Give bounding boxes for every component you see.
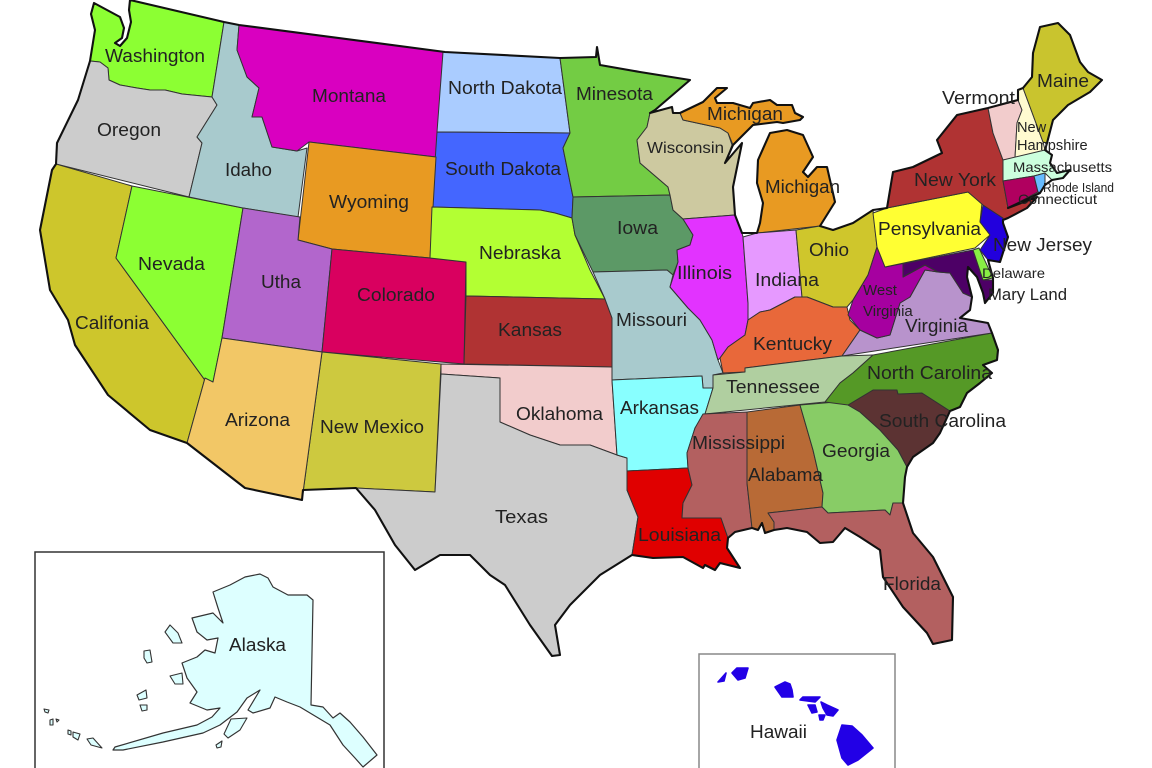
label: Florida: Florida (883, 574, 942, 594)
label: Mississippi: Mississippi (692, 433, 785, 453)
label: Nevada: Nevada (138, 254, 206, 274)
state: Kentucky (720, 297, 860, 373)
label: Maine: Maine (1037, 71, 1089, 91)
state: Missouri (593, 270, 723, 388)
label: Alaska: Alaska (229, 635, 287, 655)
label: Iowa: Iowa (617, 218, 659, 238)
label: Tennessee: Tennessee (726, 377, 820, 397)
label: Massachusetts: Massachusetts (1013, 159, 1112, 175)
state: Michigan lower peninsula (757, 130, 835, 233)
state: Nebraska (430, 207, 605, 299)
state: Tennessee (705, 355, 873, 414)
state: Ohio (796, 210, 877, 307)
state: Minnesota (560, 47, 690, 197)
state: Oregon (56, 61, 217, 197)
label: Ohio: Ohio (809, 240, 849, 260)
state: Arizona (187, 338, 322, 500)
label: Washington: Washington (105, 46, 205, 66)
label: Califonia: Califonia (75, 313, 150, 333)
Hawaii inset (699, 654, 895, 768)
label: Illinois: Illinois (677, 263, 732, 283)
state: Utah (222, 208, 332, 352)
label: North Dakota: North Dakota (448, 78, 563, 98)
label: Montana: Montana (312, 86, 387, 106)
state: New Hampshire (1015, 88, 1045, 158)
label: Missouri: Missouri (616, 310, 687, 330)
label: Pensylvania: Pensylvania (878, 219, 982, 239)
state: Delaware (973, 248, 993, 280)
label: New Hampshire: New (1017, 120, 1047, 136)
Alaska inset frame (35, 552, 384, 768)
state: South Carolina (848, 390, 950, 467)
state shapes (40, 0, 1102, 656)
label: Virginia: Virginia (905, 316, 969, 336)
state: Florida (768, 503, 953, 644)
label: Nebraska: Nebraska (479, 243, 562, 263)
label: North Carolina: North Carolina (867, 363, 993, 383)
coastline and national border outline (40, 0, 1102, 656)
state: West Virginia (848, 247, 938, 338)
state: New York (887, 108, 1037, 220)
label: Minesota: Minesota (576, 84, 654, 104)
state: Indiana (743, 230, 802, 320)
label: Arkansas: Arkansas (620, 398, 699, 418)
state: Oklahoma (441, 364, 617, 455)
state: Georgia (800, 401, 907, 515)
state: Alabama (747, 405, 823, 533)
label: Michigan upper: Michigan (707, 104, 783, 124)
state: Wyoming (298, 142, 436, 258)
label: Texas: Texas (495, 507, 548, 527)
label: West Virginia: Virginia (863, 303, 913, 320)
label: Wisconsin: Wisconsin (647, 140, 724, 157)
label: Georgia: Georgia (822, 441, 891, 461)
state: Iowa (572, 195, 693, 275)
label: Oklahoma: Oklahoma (516, 404, 604, 424)
state: Maryland (885, 250, 993, 303)
label: Michigan lower: Michigan (765, 177, 840, 197)
state: Texas (356, 374, 638, 656)
label: Idaho: Idaho (225, 160, 272, 180)
label: New York: New York (914, 170, 997, 190)
state: Nevada (116, 186, 243, 383)
state: Virginia (842, 270, 992, 356)
label: Kentucky: Kentucky (753, 334, 832, 354)
label: Indiana: Indiana (755, 270, 820, 290)
label: Louisiana: Louisiana (638, 525, 722, 545)
label: New Hampshire: Hampshire (1017, 138, 1088, 154)
Hawaiian islands (718, 668, 873, 765)
Alaska mainland (113, 574, 377, 767)
label: New Mexico: New Mexico (320, 417, 424, 437)
label: Delaware: Delaware (982, 265, 1045, 281)
label: South Carolina: South Carolina (879, 411, 1007, 431)
state: Rhode Island (1034, 173, 1045, 193)
state: Montana (237, 25, 445, 157)
state: Maine (1023, 23, 1102, 143)
state: Illinois (670, 215, 748, 360)
Hawaii inset frame (699, 654, 895, 768)
state: New Mexico (302, 352, 441, 500)
Alaska inset (35, 552, 384, 768)
label: New Jersey: New Jersey (993, 235, 1092, 255)
state: Idaho (189, 22, 307, 217)
state: South Dakota (432, 132, 573, 218)
label: Colorado: Colorado (357, 285, 435, 305)
state: North Dakota (437, 52, 570, 133)
state: North Carolina (825, 333, 998, 411)
label: Mary Land: Mary Land (988, 285, 1067, 304)
label: South Dakota: South Dakota (445, 159, 562, 179)
label: West Virginia: West (863, 282, 898, 299)
label: Arizona: Arizona (225, 410, 291, 430)
label: Oregon: Oregon (97, 120, 161, 140)
state: Kansas (464, 296, 612, 367)
state: Louisiana (627, 468, 740, 570)
state: Pennsylvania (873, 192, 990, 267)
Alaska islands (44, 625, 247, 748)
state: Washington (90, 0, 224, 97)
label: Wyoming: Wyoming (329, 192, 409, 212)
label: Hawaii: Hawaii (750, 722, 807, 742)
state: Michigan upper peninsula (680, 88, 803, 145)
label: Utha: Utha (261, 272, 302, 292)
label: Alabama: Alabama (748, 465, 824, 485)
label: Connecticut: Connecticut (1018, 191, 1097, 207)
state: Mississippi (682, 412, 752, 538)
label: Kansas: Kansas (498, 320, 562, 340)
label: Vermont: Vermont (942, 88, 1015, 108)
state: New Jersey (980, 205, 1008, 262)
state: Vermont (988, 100, 1022, 160)
state: California (40, 164, 207, 443)
state: Arkansas (612, 376, 713, 471)
state: Massachusetts (1003, 150, 1070, 181)
state: Connecticut (1003, 176, 1038, 208)
state: Wisconsin (637, 107, 742, 219)
state: Colorado (322, 249, 466, 364)
label: Rhode Island: Rhode Island (1043, 180, 1114, 195)
